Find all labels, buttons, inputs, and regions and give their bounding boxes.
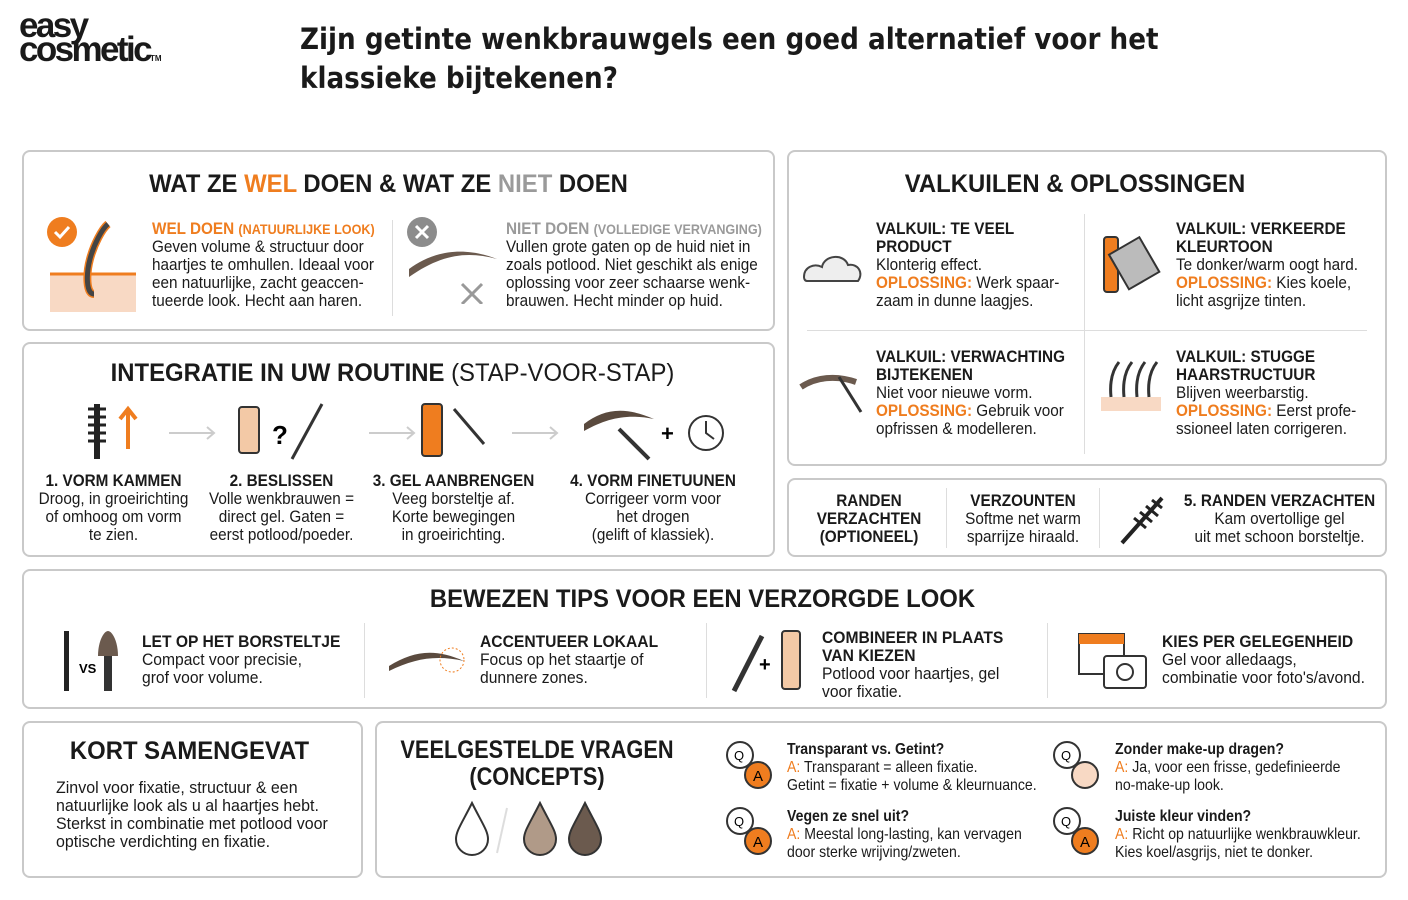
panel: randen verzachten bbox=[787, 478, 1387, 557]
icon: drops bbox=[455, 800, 602, 856]
tip 3: Potlood voor haartjes, gel bbox=[822, 664, 999, 683]
heading: WAT ZE WEL DOEN & WAT ZE NIET DOEN bbox=[149, 170, 628, 198]
title: klassieke bijtekenen? bbox=[300, 61, 618, 95]
faq 2 bbox=[787, 808, 1022, 861]
tip 1: grof voor volume. bbox=[142, 668, 263, 687]
pitfall 2: KLEURTOON bbox=[1176, 237, 1273, 256]
step 3 bbox=[373, 471, 534, 544]
pitfall 4: Blijven weerbarstig. bbox=[1176, 383, 1309, 402]
pitfall 2: VALKUIL: VERKEERDE bbox=[1176, 219, 1346, 238]
faq 1: A: Transparant = alleen fixatie. bbox=[787, 759, 978, 776]
text: verzounten: Softme net warm bbox=[965, 509, 1081, 528]
step 3: Veeg borsteltje af. bbox=[392, 489, 515, 508]
icon: hair follicle bbox=[47, 217, 136, 312]
faq 3: Zonder make-up dragen? bbox=[1115, 741, 1284, 758]
step 3: in groeirichting. bbox=[402, 525, 505, 544]
icons: steps bbox=[88, 403, 724, 460]
text: wel doen bbox=[152, 219, 375, 310]
panel: valkuilen bbox=[787, 150, 1387, 466]
pitfall 4: HAARSTRUCTUUR bbox=[1176, 365, 1315, 384]
text: step 5: Kam overtollige gel bbox=[1214, 509, 1345, 528]
pitfall 1: VALKUIL: TE VEEL bbox=[876, 219, 1014, 238]
step 3: 3. GEL AANBRENGEN bbox=[373, 471, 534, 490]
icons: QA bubbles: A bbox=[1080, 834, 1090, 851]
heading: (CONCEPTS) bbox=[469, 763, 605, 791]
title: Zijn getinte wenkbrauwgels een goed alternatief voor het bbox=[300, 22, 1159, 56]
logo: easy bbox=[19, 6, 86, 45]
panel: wel/niet doen bbox=[22, 150, 775, 331]
step 1 bbox=[39, 471, 188, 544]
tip 3 bbox=[822, 628, 1003, 701]
pitfall 1: OPLOSSING: Werk spaar- bbox=[876, 273, 1059, 292]
heading: VEELGESTELDE VRAGEN bbox=[400, 736, 674, 764]
pitfall 2: OPLOSSING: Kies koele, bbox=[1176, 273, 1351, 292]
step 4: het drogen bbox=[616, 507, 690, 526]
text: niet doen: zoals potlood. Niet geschikt als enige bbox=[506, 255, 758, 274]
pitfall 1 bbox=[876, 219, 1059, 310]
tip 2 bbox=[480, 632, 658, 687]
faq 1 bbox=[787, 741, 1037, 794]
heading bbox=[400, 736, 674, 791]
step 2: Volle wenkbrauwen = bbox=[209, 489, 354, 508]
text: niet doen bbox=[506, 219, 762, 310]
pitfall 2 bbox=[1176, 219, 1358, 310]
step 1: Droog, in groeirichting bbox=[39, 489, 188, 508]
faq 3: no-make-up look. bbox=[1115, 777, 1224, 794]
icons: QA bubbles: A bbox=[753, 834, 763, 851]
faq 2: Vegen ze snel uit? bbox=[787, 808, 909, 825]
pitfall 3: BIJTEKENEN bbox=[876, 365, 973, 384]
icons: QA bubbles: Q bbox=[734, 814, 744, 829]
panel: summary bbox=[22, 721, 363, 878]
faq 2: door sterke wrijving/zweten. bbox=[787, 844, 961, 861]
pitfall 3: opfrissen & modelleren. bbox=[876, 419, 1037, 438]
text: step 5 bbox=[1184, 491, 1375, 546]
step 2: eerst potlood/poeder. bbox=[210, 525, 353, 544]
text: Sterkst in combinatie met potlood voor bbox=[56, 814, 328, 833]
pitfall 3 bbox=[876, 347, 1065, 438]
pitfall 1: zaam in dunne laagjes. bbox=[876, 291, 1033, 310]
faq 1: Transparant vs. Getint? bbox=[787, 741, 944, 758]
text: wel doen: tueerde look. Hecht aan haren. bbox=[152, 291, 362, 310]
icons: steps: + bbox=[661, 421, 674, 446]
step 2: direct gel. Gaten = bbox=[219, 507, 344, 526]
step 4: 4. VORM FINETUUNEN bbox=[570, 471, 736, 490]
tip 4 bbox=[1162, 632, 1365, 687]
step 2 bbox=[209, 471, 354, 544]
text: wel doen: Geven volume & structuur door bbox=[152, 237, 364, 256]
heading: BEWEZEN TIPS VOOR EEN VERZORGDE LOOK bbox=[430, 585, 975, 613]
icons: tips bbox=[64, 630, 1147, 692]
icons: QA bubbles: Q bbox=[734, 748, 744, 763]
text: verzounten bbox=[965, 491, 1081, 546]
tip 4: Gel voor alledaags, bbox=[1162, 650, 1297, 669]
tip 2: Focus op het staartje of bbox=[480, 650, 643, 669]
text: niet doen: Vullen grote gaten op de huid niet in bbox=[506, 237, 750, 256]
tip 4: KIES PER GELEGENHEID bbox=[1162, 632, 1353, 651]
text: verzounten: VERZOUNTEN bbox=[970, 491, 1076, 510]
pitfall 4: VALKUIL: STUGGE bbox=[1176, 347, 1315, 366]
tip 2: dunnere zones. bbox=[480, 668, 588, 687]
step 1: te zien. bbox=[89, 525, 138, 544]
text: niet doen: brauwen. Hecht minder op huid. bbox=[506, 291, 723, 310]
heading: VALKUILEN & OPLOSSINGEN bbox=[905, 170, 1245, 198]
step 1: of omhoog om vorm bbox=[45, 507, 182, 526]
title bbox=[300, 22, 1159, 95]
tip 4: combinatie voor foto's/avond. bbox=[1162, 668, 1365, 687]
icon: spoolie bbox=[1120, 496, 1164, 544]
pitfall 1: Klonterig effect. bbox=[876, 255, 982, 274]
tip 1: LET OP HET BORSTELTJE bbox=[142, 632, 340, 651]
faq 3 bbox=[1115, 741, 1340, 794]
step 4: Corrigeer vorm voor bbox=[585, 489, 721, 508]
tip 3: voor fixatie. bbox=[822, 682, 902, 701]
faq 4: Kies koel/asgrijs, niet te donker. bbox=[1115, 844, 1313, 861]
pitfall 2: licht asgrijze tinten. bbox=[1176, 291, 1306, 310]
text: optional: VERZACHTEN bbox=[817, 509, 921, 528]
step 4 bbox=[570, 471, 736, 544]
pitfall 4 bbox=[1176, 347, 1356, 438]
text: Zinvol voor fixatie, structuur & een bbox=[56, 778, 298, 797]
text: natuurlijke look als u al haartjes hebt. bbox=[56, 796, 319, 815]
panel: tips bbox=[22, 569, 1387, 709]
step 2: 2. BESLISSEN bbox=[230, 471, 333, 490]
icons: pitfalls bbox=[799, 236, 1161, 413]
pitfall 3: OPLOSSING: Gebruik voor bbox=[876, 401, 1064, 420]
icons: tips: VS bbox=[79, 661, 97, 676]
text: optische verdichting en fixatie. bbox=[56, 832, 270, 851]
tip 2: ACCENTUEER LOKAAL bbox=[480, 632, 658, 651]
tip 3: COMBINEER IN PLAATS bbox=[822, 628, 1003, 647]
text: wel doen: WEL DOEN (NATUURLIJKE LOOK) bbox=[152, 219, 375, 238]
step 4: (gelift of klassiek). bbox=[592, 525, 714, 544]
pitfall 4: ssioneel laten corrigeren. bbox=[1176, 419, 1347, 438]
text: verzounten: sparrijze hiraald. bbox=[967, 527, 1079, 546]
heading: INTEGRATIE IN UW ROUTINE (STAP-VOOR-STAP) bbox=[111, 359, 674, 387]
pitfall 2: Te donker/warm oogt hard. bbox=[1176, 255, 1358, 274]
pitfall 3: Niet voor nieuwe vorm. bbox=[876, 383, 1032, 402]
step 3: Korte bewegingen bbox=[392, 507, 515, 526]
text: wel doen: haartjes te omhullen. Ideaal voor bbox=[152, 255, 374, 274]
logo bbox=[19, 6, 162, 69]
panel: routine bbox=[22, 342, 775, 557]
text: step 5: 5. RANDEN VERZACHTEN bbox=[1184, 491, 1375, 510]
text: step 5: uit met schoon borsteltje. bbox=[1194, 527, 1365, 546]
heading: KORT SAMENGEVAT bbox=[70, 737, 309, 765]
logo: cosmeticTM bbox=[19, 30, 162, 69]
faq 2: A: Meestal long-lasting, kan vervagen bbox=[787, 826, 1022, 843]
icons: steps: ? bbox=[272, 420, 288, 450]
faq 4 bbox=[1115, 808, 1361, 861]
faq 4: Juiste kleur vinden? bbox=[1115, 808, 1251, 825]
step 1: 1. VORM KAMMEN bbox=[45, 471, 182, 490]
icons: QA bubbles: A bbox=[753, 768, 763, 785]
pitfall 4: OPLOSSING: Eerst profe- bbox=[1176, 401, 1356, 420]
faq 4: A: Richt op natuurlijke wenkbrauwkleur. bbox=[1115, 826, 1361, 843]
faq 3: A: Ja, voor een frisse, gedefinieerde bbox=[1115, 759, 1340, 776]
icons: QA bubbles: Q bbox=[1061, 748, 1071, 763]
icon: brow cross bbox=[407, 217, 497, 304]
tip 3: VAN KIEZEN bbox=[822, 646, 916, 665]
icons: tips: + bbox=[759, 654, 771, 676]
pitfall 1: PRODUCT bbox=[876, 237, 952, 256]
tip 1: Compact voor precisie, bbox=[142, 650, 302, 669]
pitfall 3: VALKUIL: VERWACHTING bbox=[876, 347, 1065, 366]
tip 1 bbox=[142, 632, 340, 687]
text: optional: (OPTIONEEL) bbox=[820, 527, 918, 546]
text: optional: RANDEN bbox=[836, 491, 902, 510]
text: niet doen: NIET DOEN (VOLLEDIGE VERVANGING) bbox=[506, 219, 762, 238]
faq 1: Getint = fixatie + volume & kleurnuance. bbox=[787, 777, 1037, 794]
icons: QA bubbles: Q bbox=[1061, 814, 1071, 829]
panel: faq bbox=[375, 721, 1387, 878]
text: niet doen: oplossing voor zeer schaarse wenk- bbox=[506, 273, 750, 292]
icons: QA bubbles bbox=[726, 741, 1099, 855]
text: wel doen: een natuurlijke, zacht geaccen- bbox=[152, 273, 364, 292]
text: optional bbox=[816, 491, 921, 546]
text bbox=[56, 778, 328, 851]
